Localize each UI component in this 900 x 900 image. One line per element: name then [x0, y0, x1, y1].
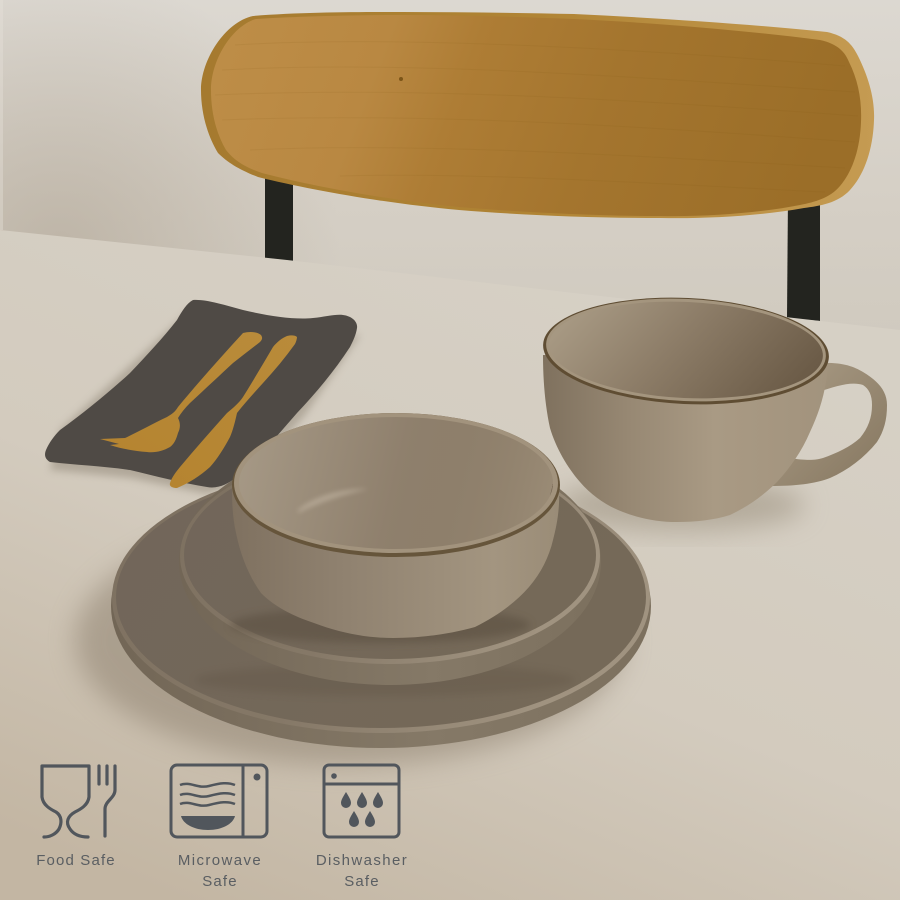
fork [99, 766, 115, 836]
dishwasher safe label: Safe [344, 873, 380, 890]
small plate shadow on large plate [195, 664, 575, 696]
chair leg right [787, 195, 820, 321]
mug shadow [555, 479, 805, 531]
table surface [0, 230, 900, 900]
microwave safe label: Microwave [178, 852, 262, 869]
wood grain [215, 42, 858, 192]
fork [100, 332, 262, 452]
chair backrest [201, 12, 874, 218]
microwave safe label: Safe [202, 873, 238, 890]
knife [170, 335, 297, 488]
small plate [179, 439, 601, 685]
microwave safe label [178, 852, 262, 890]
food safe icon [42, 766, 115, 837]
microwave safe icon [171, 765, 267, 837]
mug [541, 292, 887, 522]
mug handle [770, 363, 887, 486]
bowl shadow on plate [230, 607, 530, 643]
dishwasher safe icon [324, 765, 399, 837]
napkin [45, 300, 360, 494]
food safe label: Food Safe [36, 852, 116, 869]
dishwasher safe label: Dishwasher [316, 852, 408, 869]
wine glass [42, 766, 89, 837]
wall background [0, 0, 900, 340]
tableware soft shadow [66, 556, 632, 774]
dishwasher safe label [316, 852, 408, 890]
large plate [111, 463, 651, 748]
chair leg left [265, 170, 293, 261]
bowl [232, 413, 560, 638]
